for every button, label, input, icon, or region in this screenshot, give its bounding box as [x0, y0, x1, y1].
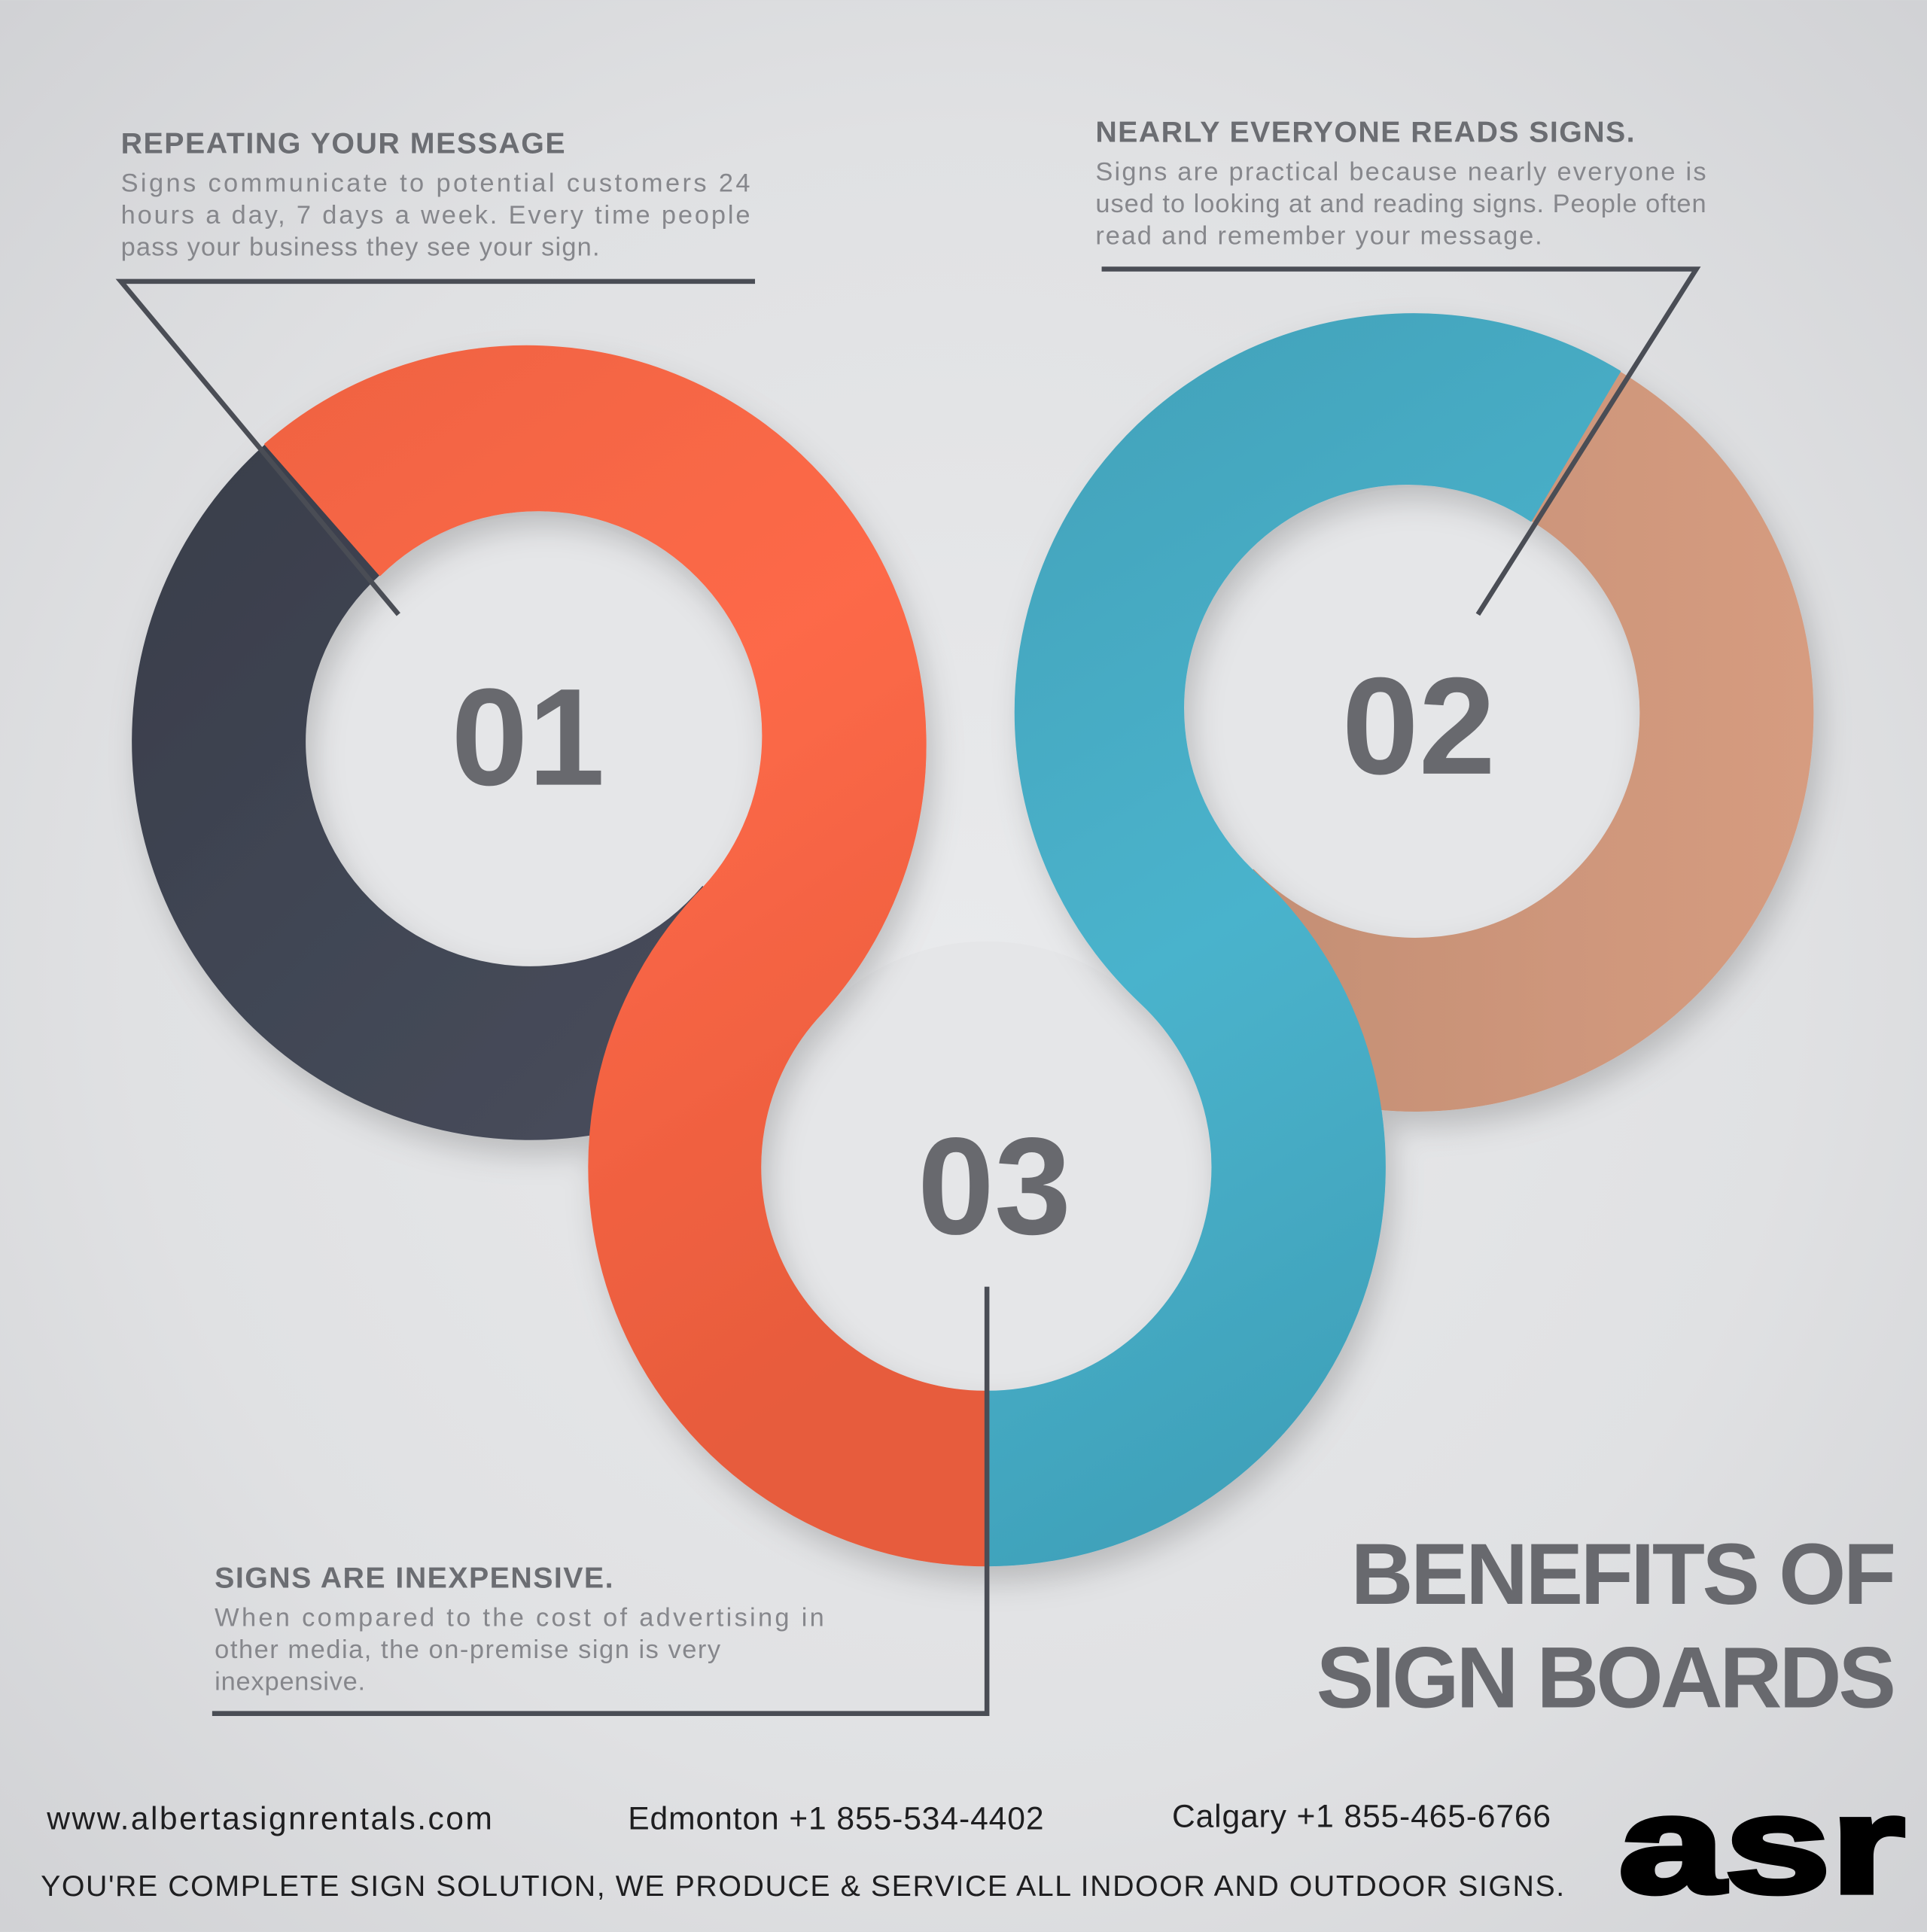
orange S band: [265, 346, 987, 1565]
text block 03: inexpensive.: [215, 1668, 365, 1696]
text block 02: Signs are practical because nearly everyone is: [1095, 158, 1706, 187]
ring 01 dark segment: [132, 432, 836, 1140]
connector line 03: [212, 1287, 987, 1714]
text block 03: SIGNS ARE INEXPENSIVE.: [215, 1562, 613, 1595]
text block 02: read and remember your message.: [1095, 222, 1542, 251]
text block 03: [215, 1562, 824, 1696]
title: SIGN BOARDS: [1317, 1629, 1896, 1726]
title: BENEFITS OF: [1351, 1526, 1896, 1623]
text block 02: [1095, 116, 1706, 251]
footer contacts: Calgary +1 855-465-6766: [1172, 1798, 1551, 1834]
number 02: 02: [1342, 649, 1496, 803]
text block 03: other media, the on-premise sign is very: [215, 1635, 721, 1664]
text block 01: pass your business they see your sign.: [121, 233, 600, 261]
text block 02: used to looking at and reading signs. People often: [1095, 190, 1706, 218]
teal S band: [987, 314, 1620, 1565]
text block 03: When compared to the cost of advertising in: [215, 1603, 824, 1632]
connector line 02: [1102, 269, 1697, 614]
connector line 01: [121, 281, 755, 614]
title: [1317, 1526, 1896, 1726]
footer contacts: [41, 1798, 1564, 1903]
text block 01: REPEATING YOUR MESSAGE: [121, 126, 565, 160]
footer contacts: Edmonton +1 855-534-4402: [628, 1801, 1044, 1837]
rings group: [132, 314, 1813, 1565]
number 01: 01: [451, 660, 605, 814]
logo asr: asr: [1618, 1767, 1904, 1921]
text block 02: NEARLY EVERYONE READS SIGNS.: [1095, 116, 1635, 149]
ring 02 tan segment: [1128, 361, 1813, 1112]
text block 01: Signs communicate to potential customers 24: [121, 169, 750, 197]
text block 01: [121, 126, 750, 261]
footer contacts: www.albertasignrentals.com: [46, 1801, 492, 1837]
footer contacts: YOU'RE COMPLETE SIGN SOLUTION, WE PRODUCE & SERVICE ALL INDOOR AND OUTDOOR SIGNS.: [41, 1870, 1564, 1903]
hole backgrounds: [305, 488, 1641, 1393]
text block 01: hours a day, 7 days a week. Every time people: [121, 201, 750, 230]
number 03: 03: [918, 1109, 1071, 1263]
